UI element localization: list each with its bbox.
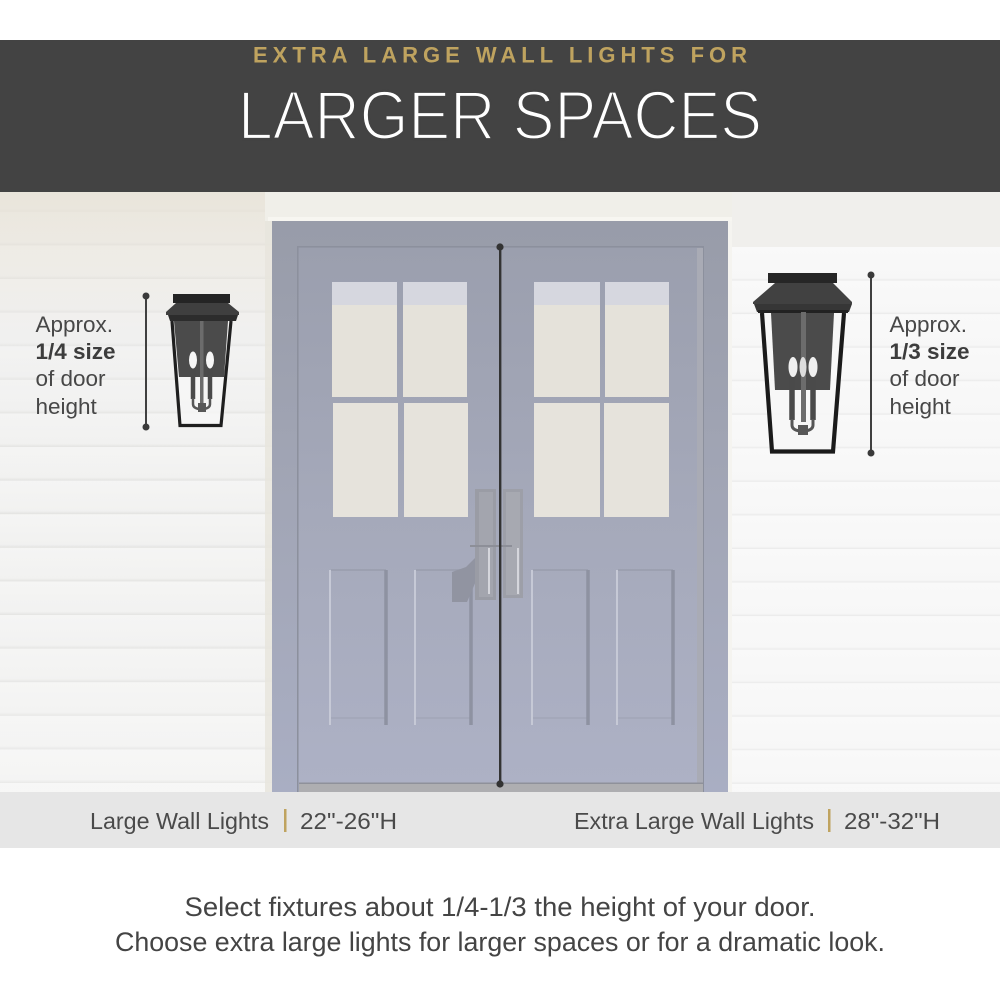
lower door panels xyxy=(330,570,673,725)
left caption: Approx. xyxy=(36,312,113,337)
eyebrow heading: EXTRA LARGE WALL LIGHTS FOR xyxy=(253,42,747,68)
size bar xyxy=(0,792,1000,848)
door height line xyxy=(496,243,504,788)
left caption: 1/4 size xyxy=(36,339,116,364)
right caption: of door xyxy=(890,366,960,391)
left caption: of door xyxy=(36,366,106,391)
icon: extra large wall light xyxy=(753,273,852,452)
extra large lights label xyxy=(574,808,940,834)
right caption: Approx. xyxy=(890,312,967,337)
header band xyxy=(0,40,1000,192)
left caption xyxy=(36,312,116,419)
large lights label xyxy=(90,808,397,834)
large lights label: 22"-26"H xyxy=(300,808,397,834)
wall siding xyxy=(0,192,1000,792)
large lights label: Large Wall Lights xyxy=(90,808,269,834)
left measure line xyxy=(142,292,150,430)
right caption: 1/3 size xyxy=(890,339,970,364)
right caption: height xyxy=(890,394,952,419)
right caption xyxy=(890,312,970,419)
footer text xyxy=(115,892,885,957)
footer text: Choose extra large lights for larger spaces or for a dramatic look. xyxy=(115,927,885,957)
double doors xyxy=(299,248,703,792)
footer text: Select fixtures about 1/4-1/3 the height of your door. xyxy=(184,892,816,922)
extra large lights label: 28"-32"H xyxy=(844,808,940,834)
door frame xyxy=(272,221,728,792)
title: LARGER SPACES xyxy=(238,77,762,154)
left caption: height xyxy=(36,394,98,419)
icon: large wall light xyxy=(166,294,239,427)
door handles xyxy=(452,489,523,602)
right measure line xyxy=(868,272,874,456)
extra large lights label: Extra Large Wall Lights xyxy=(574,808,814,834)
window panes xyxy=(332,282,669,517)
